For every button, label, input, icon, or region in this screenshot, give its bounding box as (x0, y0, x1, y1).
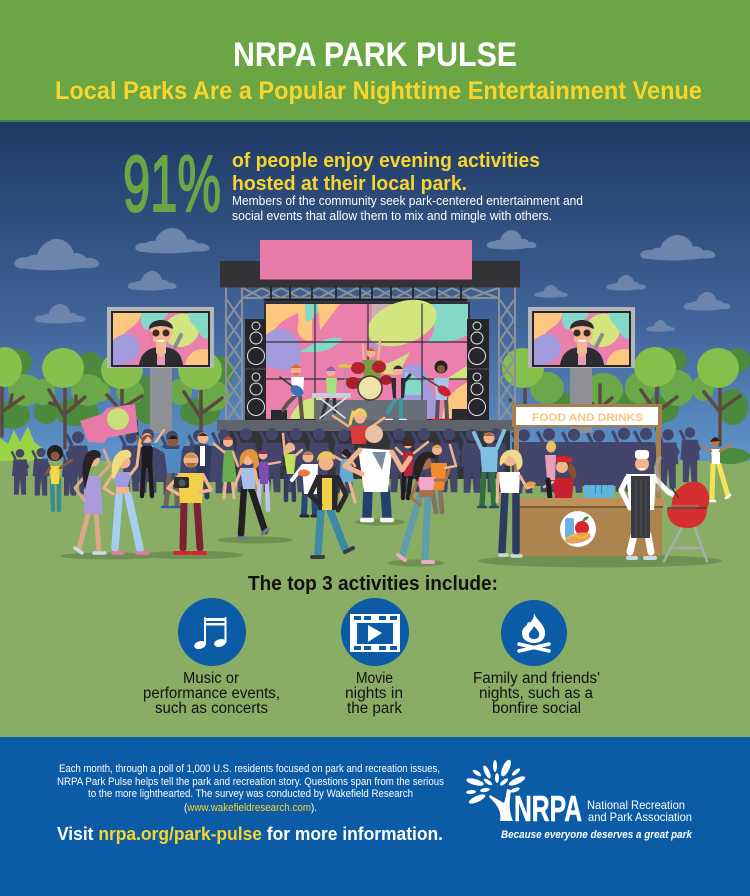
attendee: brunette in purple dress (75, 450, 110, 553)
icon: campfire (501, 600, 567, 666)
keyboard player (312, 366, 351, 418)
activity: music (143, 598, 280, 717)
attendee: blonde in blue leggings (104, 440, 148, 553)
attendee: man in suit (194, 432, 212, 497)
statistic: 91%: 91% (123, 139, 221, 228)
water bottles (584, 485, 614, 498)
speakers (245, 319, 489, 420)
attendee: purple top woman (252, 450, 280, 510)
logo tree (466, 758, 526, 821)
ground shadows (60, 518, 722, 568)
bass player (422, 360, 452, 420)
amplifiers (271, 409, 467, 420)
clouds (14, 228, 731, 332)
drummer and drum kit (338, 340, 392, 400)
crowd silhouettes (11, 427, 701, 496)
logo tagline: Because everyone deserves a great park (501, 829, 693, 841)
label (143, 670, 280, 717)
guitarist (280, 364, 306, 418)
attendee: flag (80, 404, 140, 470)
label: Music or (183, 670, 239, 687)
label: Family and friends' (473, 670, 600, 687)
attendee: photographer (168, 452, 211, 553)
stall posts (514, 420, 661, 500)
attendee: orange-haired woman in black (234, 449, 268, 538)
label: the park (347, 700, 402, 717)
statistic headline: of people enjoy evening activities (232, 149, 540, 172)
about text (57, 763, 444, 814)
server in red (544, 456, 576, 498)
stage screen (264, 291, 470, 420)
statistic description: social events that allow them to mix and mingle with others. (232, 209, 552, 223)
about text: (www.wakefieldresearch.com). (184, 802, 317, 814)
lawn (0, 461, 750, 738)
stage deck (217, 420, 514, 431)
pink banner (260, 240, 472, 280)
title: NRPA PARK PULSE (233, 36, 517, 74)
about text: Each month, through a poll of 1,000 U.S. residents focused on park and recreation issues, (59, 763, 440, 775)
icon: food badge (560, 511, 596, 547)
blonde customer (497, 450, 536, 556)
statistic description (232, 194, 583, 223)
label: such as concerts (155, 700, 268, 717)
attendee: woman in green dress (214, 436, 238, 498)
food and drinks sign: FOOD AND DRINKS (532, 412, 643, 424)
food stall back (512, 404, 662, 500)
front-row attendees (75, 425, 449, 562)
icon: film strip (341, 598, 409, 666)
attendee: man in black jacket (310, 451, 353, 557)
NRPA logo (466, 758, 693, 841)
attendee: woman in blue dress (334, 448, 355, 504)
chef (621, 450, 678, 558)
attendee: woman with yellow pants (702, 437, 732, 501)
attendee: man in orange (430, 444, 456, 512)
side screen: left (107, 307, 214, 433)
grill (656, 458, 709, 561)
activities heading: The top 3 activities include: (248, 573, 498, 595)
label: nights in (345, 685, 403, 702)
counter (516, 498, 664, 556)
attendee: ponytail woman in red (333, 408, 384, 444)
statistic description: Members of the community seek park-centered entertainment and (232, 194, 583, 208)
header band (0, 0, 750, 122)
food and drinks sign (512, 404, 662, 427)
statistic headline: hosted at their local park. (232, 172, 467, 195)
park trees (0, 347, 750, 464)
attendee: man with hot dog (292, 452, 319, 516)
light hangers (265, 287, 466, 300)
attendee: afro woman (46, 445, 72, 510)
about text: NRPA Park Pulse helps tell the park and recreation story. Questions span from the serious (57, 776, 444, 788)
logo organization name (587, 798, 692, 824)
attendee: yellow top woman (283, 434, 302, 500)
logo organization name: National Recreation (587, 798, 685, 812)
label: Movie (356, 670, 393, 687)
activity: bonfire (473, 600, 600, 717)
label: performance events, (143, 685, 280, 702)
stage (217, 240, 520, 479)
logo wordmark: NRPA (514, 788, 582, 829)
background sky (0, 122, 750, 462)
call to action: Visit nrpa.org/park-pulse for more information. (57, 823, 443, 844)
attendee: bearded man in blue (153, 432, 188, 507)
blonde server (545, 441, 556, 498)
side screen: right (528, 307, 635, 433)
food stall (497, 441, 709, 561)
stage roof (220, 261, 520, 288)
back-row attendees (46, 408, 732, 512)
singer (386, 365, 410, 420)
statistic headline (232, 149, 540, 195)
attendee: man in light blue shirt (474, 431, 504, 507)
label (473, 670, 600, 717)
about text: to the more lighthearted. The survey was conducted by Wakefield Research (88, 788, 413, 800)
logo organization name: and Park Association (588, 810, 692, 824)
attendee: bald man in white shirt (345, 425, 410, 520)
stage trusses (226, 287, 515, 421)
attendee: black jumpsuit woman (138, 430, 164, 496)
label: nights, such as a (479, 685, 593, 702)
icon: music notes (178, 598, 246, 666)
subtitle: Local Parks Are a Popular Nighttime Entertainment Venue (55, 77, 702, 105)
label (345, 670, 403, 717)
attendee: woman in pink top (398, 452, 449, 562)
label: bonfire social (492, 700, 581, 717)
drum riser (316, 400, 427, 420)
footer panel (0, 737, 750, 896)
activity: movie (341, 598, 409, 717)
attendee: woman in red top (396, 438, 428, 498)
